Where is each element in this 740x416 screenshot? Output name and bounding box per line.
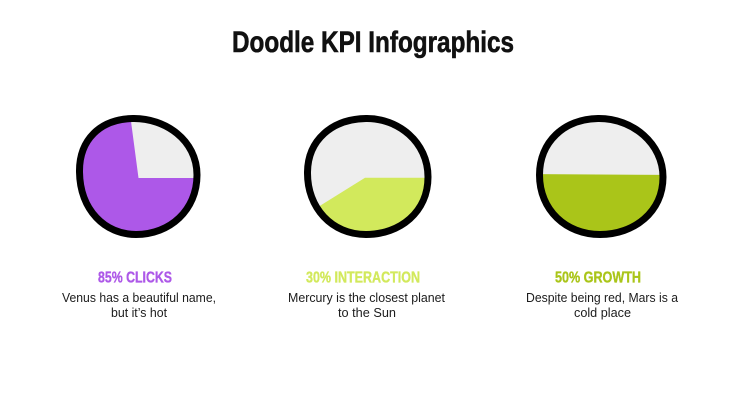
chart: interaction doodle pie — [304, 115, 432, 238]
chart: clicks doodle pie — [76, 115, 200, 238]
text block: growth description: Despite being red, Mars is a — [526, 290, 679, 305]
text block: interaction description — [288, 290, 445, 320]
chart: growth doodle pie — [536, 115, 666, 238]
text block: interaction description: Mercury is the closest planet — [288, 290, 445, 305]
panel: clicks KPI — [62, 110, 216, 320]
text block: growth description — [526, 290, 679, 320]
heading: 30% interaction: 30% INTERACTION — [306, 270, 420, 286]
text block: growth description: cold place — [574, 305, 631, 320]
text block: interaction description: to the Sun — [338, 305, 396, 320]
heading: 50% growth: 50% GROWTH — [555, 270, 641, 286]
heading: 85% clicks: 85% CLICKS — [98, 270, 172, 286]
text block: clicks description: Venus has a beautiful name, — [62, 290, 216, 305]
text block: clicks description: but it’s hot — [111, 305, 167, 320]
panel: interaction KPI — [288, 110, 445, 320]
title: Doodle KPI Infographics — [232, 26, 514, 59]
panel: growth KPI — [526, 110, 679, 320]
text block: clicks description — [62, 290, 216, 320]
